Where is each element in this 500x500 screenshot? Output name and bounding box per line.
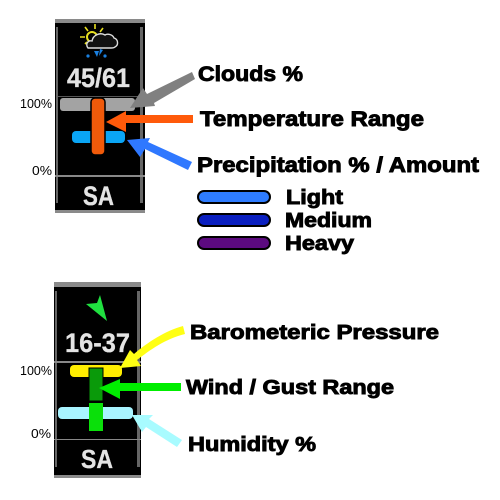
precipitation bar xyxy=(72,131,125,143)
legend: precipitation intensity xyxy=(198,187,372,255)
clouds bar xyxy=(60,98,135,111)
wind range bar xyxy=(89,368,103,401)
icon: wind direction arrow xyxy=(86,295,107,321)
label: barometric pressure: Barometeric Pressure xyxy=(190,322,439,344)
temperature range bar xyxy=(91,98,105,155)
label: precipitation: Precipitation % / Amount xyxy=(197,154,479,177)
panel: wind and humidity column xyxy=(54,282,141,478)
day label: SA xyxy=(83,181,114,211)
day label: SA xyxy=(81,444,113,474)
legend label: heavy: Heavy xyxy=(285,233,355,255)
legend swatch: medium xyxy=(198,214,270,226)
arrow: wind gust range xyxy=(99,379,181,399)
legend label: light: Light xyxy=(286,187,343,209)
label: temperature range: Temperature Range xyxy=(200,108,424,131)
arrow: clouds xyxy=(130,72,195,108)
axis label: 0%: 0% xyxy=(31,426,51,441)
arrow: temperature range xyxy=(106,111,193,132)
legend swatch: heavy xyxy=(198,237,270,249)
arrow: humidity xyxy=(132,415,182,447)
legend label: medium: Medium xyxy=(285,210,372,232)
label: wind gust range: Wind / Gust Range xyxy=(186,377,394,399)
label: humidity: Humidity % xyxy=(188,434,316,456)
icon: sun and rain cloud xyxy=(80,24,118,58)
label: clouds: Clouds % xyxy=(198,63,303,86)
legend swatch: light xyxy=(198,191,270,203)
wind speed value: 16-37 xyxy=(65,328,130,358)
axis label: 0%: 0% xyxy=(32,163,52,178)
axis label: 100%: 100% xyxy=(20,363,52,378)
temperature low/high value: 45/61 xyxy=(67,63,130,93)
humidity bar xyxy=(58,407,133,419)
barometric pressure bar xyxy=(70,365,122,377)
arrow: precipitation xyxy=(127,138,192,170)
arrow: barometric pressure xyxy=(120,326,185,368)
panel: weather forecast column xyxy=(55,19,145,213)
axis label: 100%: 100% xyxy=(20,96,52,111)
gust range bar xyxy=(89,403,103,431)
